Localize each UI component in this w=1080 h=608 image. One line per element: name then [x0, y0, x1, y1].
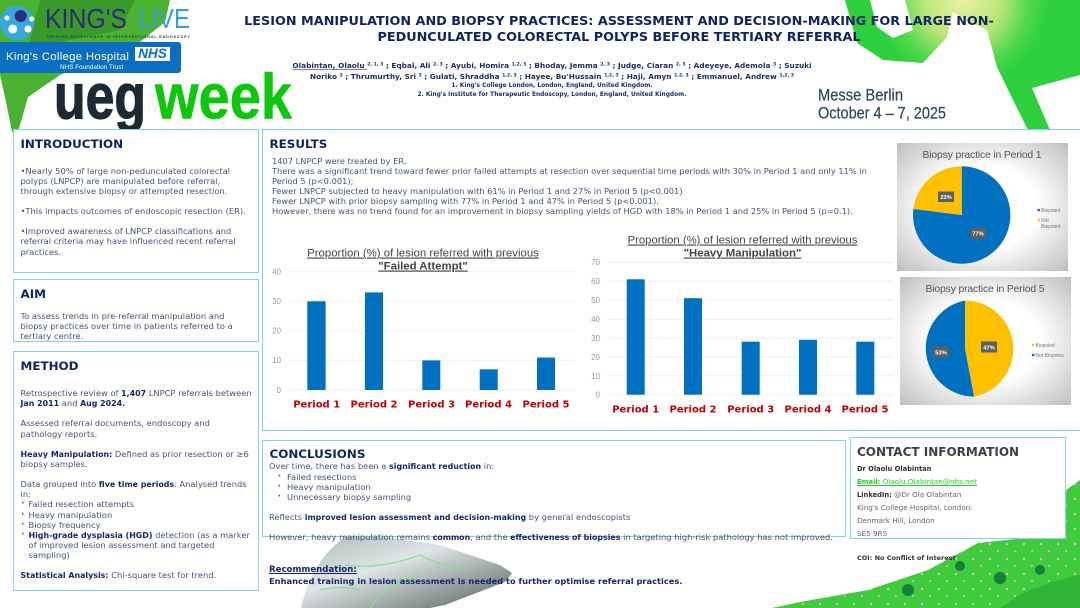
bar chart: heavy manipulation: 70	[591, 258, 601, 267]
pie chart: biopsy practice in period 1: Not	[1041, 218, 1049, 224]
text: contact details: Dr Olaolu Olabintan	[857, 465, 931, 473]
panel: results	[262, 129, 1080, 431]
pie chart: biopsy practice in period 5: Biopsied	[1036, 343, 1055, 349]
panel: method	[13, 351, 259, 591]
pie chart: biopsy practice in period 1: 77%	[972, 232, 984, 238]
authors	[292, 61, 812, 80]
pie chart: biopsy practice in period 1	[897, 143, 1068, 271]
bar chart: heavy manipulation: 30	[591, 334, 601, 343]
bar chart: failed attempt: Period 5	[523, 400, 570, 411]
bar chart: heavy manipulation: Proportion (%) of lesion referred with previous	[628, 234, 858, 246]
bar chart: failed attempt: 40	[272, 268, 282, 276]
bar chart: heavy manipulation: 0	[596, 390, 601, 400]
logo: King's Live: LIVE	[138, 3, 190, 34]
text: conclusions body: However, heavy manipulation remains common, and the effectiveness of biopsies in targeting high-risk pathology has not improved.	[269, 532, 833, 542]
text: conclusions body: Unnecessary biopsy sampling	[287, 492, 411, 502]
pie chart: biopsy practice in period 5: 53%	[935, 350, 947, 356]
logo: King's Live: KING'S	[45, 3, 127, 34]
text: contact details: Email: Olaolu.Olabintan@nhs.net	[857, 477, 977, 486]
text: results summary: 1407 LNPCP were treated by ER.	[272, 156, 406, 166]
text: results summary: There was a significant trend toward fewer prior failed attempts at resection over sequential time periods with 30% in Period 1 and only 11% in	[272, 166, 867, 176]
bar chart: heavy manipulation: Period 3	[727, 405, 774, 416]
text: results summary: Period 5 (p<0.001);	[272, 176, 353, 186]
text: method: Heavy manipulation	[28, 510, 112, 520]
text: aim: To assess trends in pre-referral manipulation and	[20, 311, 224, 321]
title: PEDUNCULATED COLORECTAL POLYPS BEFORE TERTIARY REFERRAL	[377, 30, 861, 44]
bar chart: heavy manipulation: 20	[591, 353, 601, 362]
bar chart: failed attempt: 0	[277, 386, 282, 395]
bar chart: failed attempt: Period 2	[351, 400, 398, 411]
text: conclusions body: Heavy manipulation	[287, 482, 371, 492]
logo: King's College Hospital NHS banner: NHS Foundation Trust	[60, 64, 123, 71]
bar chart: failed attempt: "Failed Attempt"	[378, 260, 468, 272]
bar chart: failed attempt: Period 3	[408, 400, 455, 411]
text: results summary: However, there was no trend found for an improvement in biopsy sampling yields of HGD with 18% in Period 1 and 25% in Period 5 (p=0.1).	[272, 206, 853, 216]
pie chart: biopsy practice in period 1: Biopsy practice in Period 1	[922, 150, 1042, 161]
text: method: biopsy samples.	[20, 459, 88, 469]
pie chart: biopsy practice in period 1: Biopsied	[1041, 208, 1060, 214]
text: contact details: King's College Hospital, London.	[857, 503, 972, 512]
text: results summary: Fewer LNPCP with prior biopsy sampling with 77% in Period 1 and 47% in Period 5 (p<0.001).	[272, 196, 659, 206]
logo: UEG Week: week	[154, 60, 292, 132]
pie chart: biopsy practice in period 5: Biopsy practice in Period 5	[926, 284, 1045, 295]
text: method: Failed resection attempts	[28, 499, 134, 509]
text: aim	[20, 311, 233, 341]
text: conclusions body: Over time, there has been a significant reduction in:	[269, 461, 494, 471]
text: introduction bullets: polyps (LNPCP) are manipulated before referral,	[20, 176, 220, 186]
pie chart: biopsy practice in period 5	[900, 277, 1071, 405]
text: method: Heavy Manipulation: Defined as prior resection or ≥6	[20, 449, 249, 459]
heading: method: METHOD	[20, 359, 78, 373]
bar chart: heavy manipulation: 50	[591, 296, 601, 305]
text: introduction bullets: •Improved awareness of LNPCP classifications and	[20, 226, 231, 236]
text: introduction bullets	[20, 166, 246, 257]
affiliations	[417, 82, 687, 98]
authors: Noriko 2 ; Thrumurthy, Sri 3 ; Gulati, Shraddha 1,2, 3 ; Hayee, Bu'Hussain 1,2, 3 ; Haji, Amyn 1,2, 3 ; Emmanuel, Andrew 1,2, 3	[310, 72, 794, 80]
logo: King's Live: DRIVING EXCELLENCE IN INTERVENTIONAL ENDOSCOPY	[47, 35, 190, 39]
logo: King's College Hospital NHS banner	[0, 42, 181, 73]
venue and dates	[818, 86, 946, 122]
heading: results: RESULTS	[270, 137, 327, 151]
conflict of interest statement: COI: No Conflict of Interest	[857, 554, 956, 562]
text: introduction bullets: referral criteria may have influenced recent referral	[20, 236, 236, 246]
recommendation: Recommendation:	[269, 564, 357, 574]
heading: introduction: INTRODUCTION	[20, 137, 123, 151]
bar chart: heavy manipulation: 60	[591, 277, 601, 286]
bar chart: failed attempt: Proportion (%) of lesion referred with previous	[307, 248, 539, 260]
bar chart: heavy manipulation: 10	[591, 372, 601, 381]
text: method	[20, 388, 252, 580]
heading: conclusions: CONCLUSIONS	[270, 447, 365, 461]
text: method: Jan 2011 and Aug 2024.	[20, 398, 125, 408]
bar chart: failed attempt: Period 1	[293, 400, 340, 411]
text: method: High-grade dysplasia (HGD) detection (as a marker	[28, 530, 250, 540]
text: aim: tertiary centre.	[20, 331, 83, 341]
bar chart: heavy manipulation: Period 5	[842, 405, 889, 416]
text: conclusions body	[269, 461, 833, 542]
text: aim: biopsy practices over time in patients referred to a	[20, 321, 233, 331]
bar chart: failed attempt: 10	[272, 356, 282, 365]
bar chart: heavy manipulation: Period 2	[670, 405, 717, 416]
pie chart: biopsy practice in period 1: 23%	[940, 195, 952, 201]
text: introduction bullets: practices.	[20, 247, 61, 257]
logo: UEG Week	[54, 60, 292, 132]
bar chart: heavy manipulation	[591, 234, 893, 416]
bar chart: heavy manipulation: Period 4	[785, 405, 832, 416]
title: LESION MANIPULATION AND BIOPSY PRACTICES: ASSESSMENT AND DECISION-MAKING FOR LARGE NON-	[244, 14, 994, 28]
recommendation	[269, 564, 682, 586]
panel: contact information	[850, 437, 1066, 539]
text: results summary	[272, 156, 867, 216]
bar chart: failed attempt: Period 4	[465, 400, 512, 411]
text: introduction bullets: •Nearly 50% of large non-pedunculated colorectal	[20, 166, 230, 176]
text: method: Retrospective review of 1,407 LNPCP referrals between	[20, 388, 252, 398]
text: contact details: SE5 9RS	[857, 529, 887, 538]
text: method: in:	[20, 489, 31, 499]
affiliations: 2. King's Institute for Therapeutic Endoscopy, London, England, United Kingdom.	[417, 92, 687, 98]
pie chart: biopsy practice in period 5: Not Biopsies	[1036, 353, 1064, 359]
text: method: of improved lesion assessment and targeted	[28, 540, 214, 550]
recommendation: Enhanced training in lesion assessment is needed to further optimise referral practices.	[269, 576, 682, 586]
venue and dates: October 4 – 7, 2025	[818, 104, 946, 122]
text: results summary: Fewer LNPCP subjected to heavy manipulation with 61% in Period 1 and 27% in Period 5 (p<0.001)	[272, 186, 683, 196]
panel: conclusions	[262, 440, 846, 537]
authors: Olabintan, Olaolu 2, 1, 3 ; Eqbal, Ali 2, 3 ; Ayubi, Homira 1,2, 3 ; Bhoday, Jemma 2, 3 ; Judge, Ciaran 2, 3 ; Adeyeye, Ademola 3 ; Suzuki	[292, 61, 812, 70]
logo: King's College Hospital NHS banner: NHS	[138, 46, 167, 61]
panel: introduction	[13, 129, 259, 273]
text: contact details	[857, 465, 977, 538]
text: conclusions body: Reflects improved lesion assessment and decision-making by general endoscopists	[269, 512, 630, 522]
bar chart: failed attempt	[272, 248, 575, 411]
bar chart: heavy manipulation: Period 1	[612, 405, 659, 416]
text: method: pathology reports.	[20, 429, 97, 439]
bar chart: heavy manipulation: 40	[591, 315, 601, 324]
logo: UEG Week: ueg	[54, 60, 146, 132]
text: introduction bullets: through extensive biopsy or attempted resection.	[20, 186, 227, 196]
text: method: Data grouped into five time periods. Analysed trends	[20, 479, 247, 489]
heading: contact information: CONTACT INFORMATION	[857, 444, 1019, 458]
text: contact details: LinkedIn: @Dr Ola Olabintan	[857, 490, 961, 499]
bar chart: heavy manipulation: "Heavy Manipulation"	[684, 248, 801, 260]
logo: King's College Hospital NHS banner: King's College Hospital	[6, 51, 129, 63]
text: method: sampling)	[28, 550, 70, 560]
bar chart: failed attempt: 20	[272, 327, 282, 336]
text: contact details: Denmark Hill, London	[857, 516, 935, 525]
heading: aim: AIM	[20, 287, 46, 301]
text: method: Biopsy frequency	[28, 520, 101, 530]
text: introduction bullets: •This impacts outcomes of endoscopic resection (ER).	[20, 206, 246, 216]
venue and dates: Messe Berlin	[818, 86, 903, 104]
logo: King's Live	[0, 3, 190, 40]
affiliations: 1. King's College London, London, England, United Kingdom.	[451, 83, 653, 89]
pie chart: biopsy practice in period 5: 47%	[983, 345, 995, 351]
text: conclusions body: Failed resections	[287, 472, 357, 482]
pie chart: biopsy practice in period 1: Biopsied	[1041, 224, 1060, 230]
text: method: Statistical Analysis: Chi-square test for trend.	[20, 570, 216, 580]
title	[244, 14, 994, 44]
bar chart: failed attempt: 30	[272, 297, 282, 306]
text: method: Assessed referral documents, endoscopy and	[20, 418, 210, 428]
panel: aim	[13, 279, 259, 342]
